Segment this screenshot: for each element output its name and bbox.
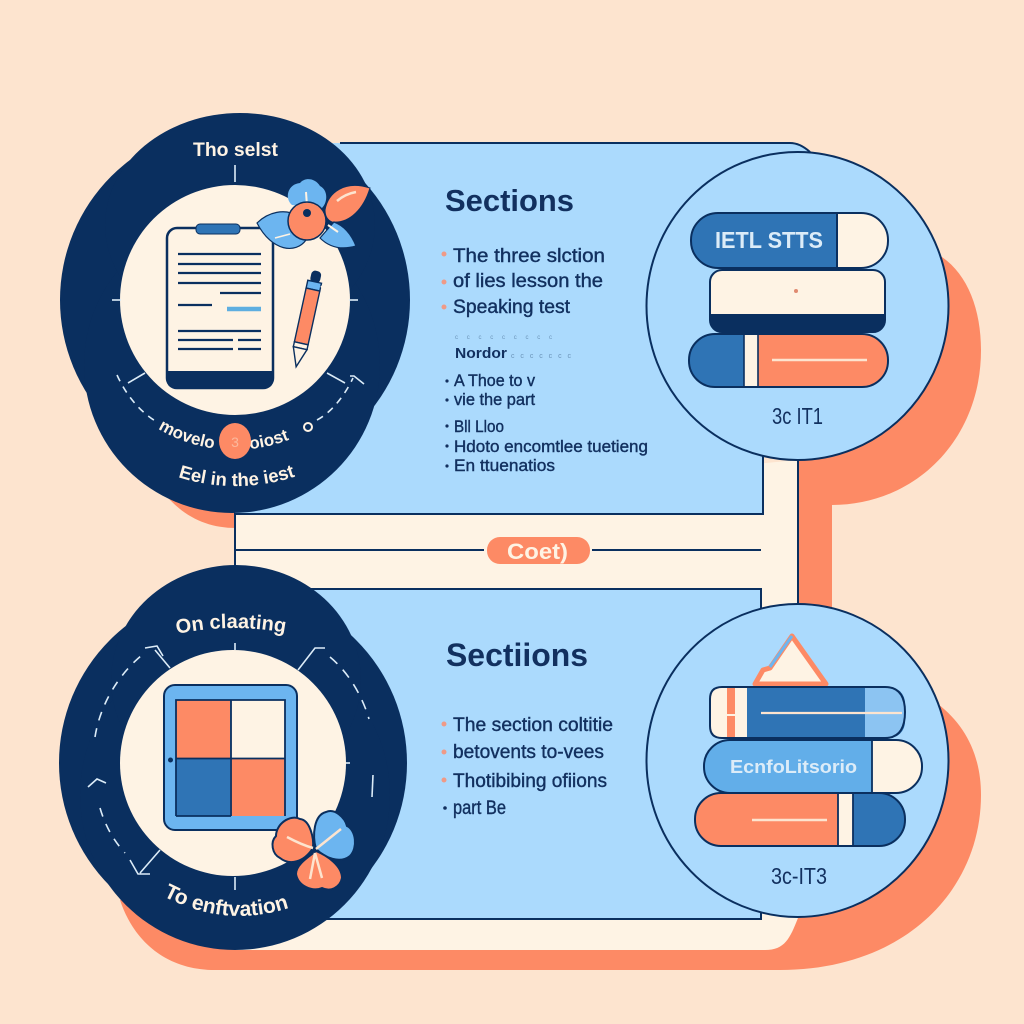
- book: coral: [688, 334, 888, 387]
- circle: bottom right books: [646, 604, 948, 917]
- curved label: right: oiost: [250, 430, 290, 449]
- heading: Sections: [445, 183, 574, 218]
- icon: clipboard: [167, 224, 273, 388]
- navy blob: [60, 113, 410, 513]
- bullets: [442, 252, 446, 310]
- badge: connector pill: [487, 537, 590, 564]
- book: mid blue: EcnfoLitsorio: [730, 757, 857, 777]
- heading: Sectiions: [446, 637, 588, 673]
- secondary list: vie the part: [454, 391, 535, 409]
- number badge: 3: [231, 434, 239, 450]
- inner cream circle: [120, 185, 350, 415]
- bullet list: [453, 246, 605, 318]
- circle group: bottom left: [59, 565, 407, 950]
- small notes: c c c c c c c: [511, 353, 572, 360]
- small notes: [455, 335, 572, 362]
- bullet list: The three slction: [453, 246, 605, 267]
- ticks and dashed arrows: [112, 165, 364, 422]
- bullet list: part Be: [453, 798, 506, 819]
- icon: tablet grid: [164, 685, 297, 830]
- bullet list: of lies lesson the: [453, 271, 603, 292]
- small bullets: [445, 379, 449, 468]
- circle group: top left: [60, 113, 410, 513]
- inner cream circle: [120, 650, 346, 876]
- small notes: Nordor: [455, 345, 507, 362]
- book: IELTS: [691, 213, 888, 268]
- curved label: top: Tho selst: [193, 140, 279, 161]
- curved label: left: movelo: [158, 422, 214, 448]
- secondary list: A Thoe to v: [454, 372, 536, 390]
- panel: bottom section: [300, 589, 761, 919]
- bullet list: The section coltitie: [453, 715, 613, 736]
- secondary list: En ttuenatios: [454, 457, 555, 475]
- secondary list: Bll Lloo: [454, 418, 504, 436]
- ticks and dashed arrows: [88, 643, 373, 890]
- curved label: bottom: To enftvation: [167, 883, 288, 916]
- coral backing shape: top right: [790, 257, 981, 610]
- book: coral: [694, 793, 905, 846]
- secondary list: [454, 372, 648, 475]
- bullet list: Speaking test: [453, 297, 571, 318]
- icon: triangle: [755, 636, 826, 684]
- navy blob: [59, 565, 407, 950]
- icon: pen: [289, 270, 327, 369]
- curved label: top: On claating: [176, 614, 286, 636]
- book: mid blue: [704, 740, 922, 793]
- bullet list: [453, 715, 613, 819]
- cream backing panel: [235, 460, 798, 950]
- number badge: [219, 423, 251, 459]
- badge: connector pill: Coet): [507, 539, 568, 564]
- circle: top right books: [646, 152, 948, 460]
- icon: clover flower: [273, 811, 355, 890]
- icon: flower: [257, 179, 370, 248]
- bullet list: Thotibibing ofiions: [453, 771, 607, 792]
- panel: top section: [235, 143, 810, 515]
- bullet list: betovents to-vees: [453, 742, 604, 763]
- bullets: [442, 722, 447, 810]
- small notes: c c c c c c c c c: [455, 335, 552, 341]
- curved label: bottom: Eel in the iest: [179, 465, 296, 486]
- label: 3c IT1: [772, 403, 823, 429]
- small ring: [304, 423, 312, 431]
- label: 3c-IT3: [771, 863, 827, 889]
- secondary list: Hdoto encomtlee tuetieng: [454, 438, 648, 456]
- book: cream: [710, 270, 885, 332]
- coral backing shape: bottom: [120, 700, 981, 970]
- book: blue: [710, 687, 905, 738]
- coral backing shape: top left: [160, 470, 236, 528]
- book: IELTS: IETL STTS: [715, 227, 823, 253]
- text block: top section: [442, 183, 648, 475]
- text block: bottom section: [442, 637, 613, 819]
- cream connector divider lines: [235, 458, 798, 606]
